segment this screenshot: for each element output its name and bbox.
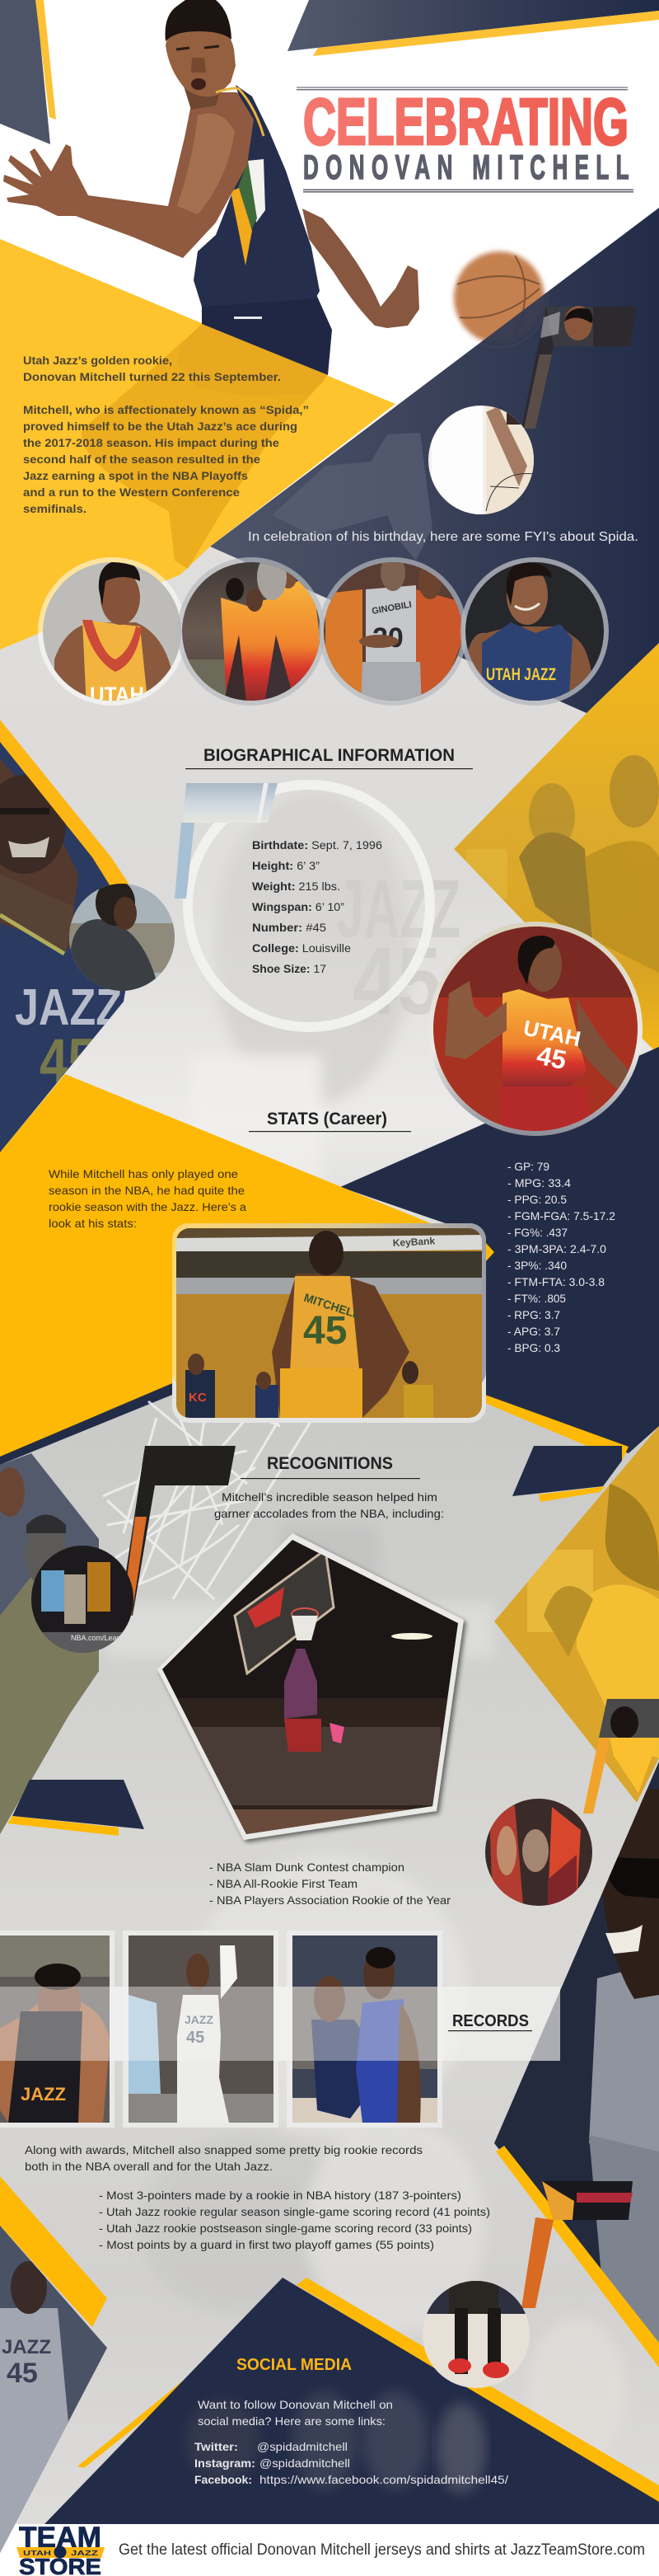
records photo 2 <box>123 1931 278 2128</box>
small circle crowd: NBA.com/League <box>71 1634 129 1642</box>
recognitions intro <box>214 1490 444 1520</box>
face <box>166 23 236 96</box>
left translucent player panel <box>0 1451 107 1838</box>
intro text: the 2017-2018 season. His impact during the <box>23 436 279 449</box>
yellow strip right diagonal <box>496 2146 659 2367</box>
intro text: proved himself to be the Utah Jazz’s ace during <box>23 420 297 433</box>
OKC players <box>185 1354 433 1418</box>
yellow strip above social media triangle <box>297 2278 659 2506</box>
biography facts: Weight: 215 lbs. <box>252 880 340 893</box>
small circle with legs <box>423 2281 530 2388</box>
small navy accent left <box>7 1780 144 1836</box>
player in stats photo: MITCHELL <box>302 1291 362 1321</box>
stats list: - FG%: .437 <box>507 1226 568 1239</box>
yellow strip under navy panel <box>485 1395 629 1461</box>
team store logo <box>16 2522 105 2576</box>
social media text <box>194 2398 508 2486</box>
records list: - Utah Jazz rookie postseason single-game scoring record (33 points) <box>99 2222 472 2235</box>
hair <box>166 0 231 41</box>
facial detail <box>176 46 219 49</box>
intro text <box>23 354 309 515</box>
recognitions intro: Mitchell’s incredible season helped him <box>222 1490 437 1504</box>
circle photo 3: 20 <box>372 622 404 654</box>
stats photo <box>172 1223 486 1423</box>
navy strip under yellow panel <box>0 1382 176 1465</box>
recognitions list: - NBA Slam Dunk Contest champion <box>209 1860 404 1874</box>
left yellow strip bottom <box>0 2176 107 2327</box>
social media text: Facebook: <box>194 2473 252 2486</box>
circle photo 4 <box>460 556 610 709</box>
basketball <box>454 251 544 344</box>
records photo 2: JAZZ <box>185 2013 213 2026</box>
letter J photo top: bowl <box>428 406 534 514</box>
ghost legs in intro panel <box>82 329 432 569</box>
stats list: - APG: 3.7 <box>507 1325 560 1338</box>
small circle: man in hoodie overlooking city <box>69 880 175 993</box>
band tint over record photos <box>0 1987 442 2061</box>
yellow strip left of social triangle <box>77 2381 186 2468</box>
records photo 1 <box>0 1931 115 2128</box>
circle photo 4: UTAH JAZZ <box>486 665 556 684</box>
big biography ring <box>188 785 430 1027</box>
ghost Jazz 45 jersey text <box>336 863 460 1035</box>
small navy accent right <box>512 1446 622 1502</box>
circle photo 2 <box>177 554 325 709</box>
stats photo: KeyBank <box>392 1235 436 1249</box>
records intro text <box>25 2143 423 2173</box>
social media text: social media? Here are some links: <box>198 2414 386 2428</box>
stats list: - BPG: 0.3 <box>507 1341 560 1354</box>
small circle crowd <box>485 1799 592 1906</box>
far arm <box>302 209 419 328</box>
stats list: - 3PM-3PA: 2.4-7.0 <box>507 1242 606 1255</box>
small circle crowd <box>31 1546 133 1653</box>
letter J city photo <box>69 783 278 993</box>
photo circles row <box>33 552 610 709</box>
yellow intro panel <box>0 239 395 650</box>
stats list: - 3P%: .340 <box>507 1259 567 1272</box>
left dark player panel: 45 <box>40 1026 96 1096</box>
heading: stats career: STATS (Career) <box>267 1110 387 1128</box>
ghost Jazz 45 jersey text: 45 <box>353 927 442 1035</box>
left yellow strip <box>0 720 144 940</box>
shorts <box>202 293 332 375</box>
biography facts <box>252 838 382 975</box>
biography facts: Birthdate: Sept. 7, 1996 <box>252 838 382 852</box>
circle photo 3: GINOBILI <box>371 600 413 617</box>
records list: - Most 3-pointers made by a rookie in NBA history (187 3-pointers) <box>99 2189 461 2202</box>
heading: records: RECORDS <box>452 2012 529 2030</box>
stats list: - FT%: .805 <box>507 1292 566 1305</box>
top left corner shape <box>0 0 56 144</box>
right gold panel lower with ghost player <box>494 1426 659 1803</box>
stats list <box>507 1160 615 1354</box>
big jumping player circle: UTAH <box>521 1016 583 1051</box>
intro text: second half of the season resulted in the <box>23 453 260 466</box>
stats intro text: While Mitchell has only played one <box>49 1167 238 1180</box>
letter J photo top: bar and stem <box>521 306 637 429</box>
social media text: Want to follow Donovan Mitchell on <box>198 2398 393 2411</box>
stats intro text: rookie season with the Jazz. Here’s a <box>49 1200 246 1213</box>
social media triangle <box>44 2278 659 2524</box>
yellow arrow tip <box>486 1243 494 1261</box>
biography facts: Height: 6’ 3” <box>252 859 320 872</box>
stats intro text: look at his stats: <box>49 1217 137 1230</box>
records list <box>99 2189 490 2251</box>
letter J fourth: photo at bottom right <box>423 2181 633 2388</box>
social media text: @spidadmitchell <box>257 2440 348 2453</box>
intro text: Utah Jazz’s golden rookie, <box>23 354 172 367</box>
left player panel bottom: JAZZ <box>2 2336 51 2358</box>
intro text: Donovan Mitchell turned 22 this September. <box>23 370 281 383</box>
letter J recognitions photo <box>31 1446 236 1653</box>
ghost background figures <box>107 791 626 2465</box>
recognitions intro: garner accolades from the NBA, including: <box>214 1507 444 1520</box>
left player panel bottom: 45 <box>7 2358 38 2389</box>
title rules <box>297 87 633 193</box>
team store logo: UTAH <box>23 2550 51 2557</box>
social media text: @spidadmitchell <box>259 2456 350 2470</box>
letter J third: lower right photo <box>485 1699 659 1906</box>
jersey collar <box>216 88 264 136</box>
upper and fore arm with hand <box>3 92 254 258</box>
hero player Donovan Mitchell <box>3 0 547 375</box>
circle photo 1 <box>38 557 181 706</box>
navy over ball <box>480 292 547 346</box>
social media text: Twitter: <box>194 2440 238 2453</box>
heading: recognitions: RECOGNITIONS <box>267 1454 393 1473</box>
team store logo: JAZZ <box>71 2550 98 2557</box>
arm highlight <box>177 114 235 214</box>
player in stats photo <box>272 1231 409 1418</box>
biography facts: College: Louisville <box>252 941 351 955</box>
team store logo: TEAM <box>19 2522 101 2554</box>
birthday line: In celebration of his birthday, here are some FYI's about Spida. <box>248 530 638 544</box>
left dark player panel: JAZZ <box>15 979 122 1036</box>
legs tinted yellow <box>177 324 328 396</box>
basketball net <box>103 1401 313 1599</box>
title line 2: DONOVAN MITCHELL <box>303 148 629 187</box>
title <box>303 85 629 187</box>
stats list: - FGM-FGA: 7.5-17.2 <box>507 1209 615 1222</box>
recognitions list <box>209 1860 451 1907</box>
records photo 1: JAZZ <box>21 2084 66 2104</box>
yellow stats panel <box>0 1074 437 1457</box>
dunk photo <box>157 1533 465 1842</box>
biography facts: Number: #45 <box>252 921 326 934</box>
right gold panel with ghost players <box>454 643 659 1055</box>
stats intro text <box>49 1167 246 1230</box>
jersey side stripes <box>231 159 265 265</box>
records intro text: Along with awards, Mitchell also snapped some pretty big rookie records <box>25 2143 423 2156</box>
gray textured background <box>0 547 659 2524</box>
intro text: Mitchell, who is affectionately known as “Spida,” <box>23 403 309 416</box>
left player panel bottom <box>0 2226 111 2555</box>
stats list: - PPG: 20.5 <box>507 1193 567 1206</box>
biography facts: Wingspan: 6’ 10” <box>252 900 344 913</box>
stats list: - MPG: 33.4 <box>507 1176 571 1189</box>
player in stats photo: 45 <box>303 1309 347 1353</box>
social media text: Instagram: <box>194 2456 255 2470</box>
OKC players: KC <box>189 1391 207 1405</box>
dark man panel right <box>486 1756 659 2358</box>
heading: social media: SOCIAL MEDIA <box>236 2356 352 2374</box>
big jumping player circle: 45 <box>535 1040 569 1075</box>
intro text: Jazz earning a spot in the NBA Playoffs <box>23 469 248 482</box>
stats list: - FTM-FTA: 3.0-3.8 <box>507 1275 605 1288</box>
circle photo 1: UTAH <box>90 683 144 707</box>
heading: biographical information: BIOGRAPHICAL INFORMATION <box>203 746 455 765</box>
left dark player panel <box>0 742 125 1152</box>
stats list: - RPG: 3.7 <box>507 1308 560 1321</box>
stats intro text: season in the NBA, he had quite the <box>49 1184 245 1197</box>
records photo 2: 45 <box>186 2029 204 2047</box>
records photo 3 <box>287 1931 442 2128</box>
biography facts: Shoe Size: 17 <box>252 962 326 975</box>
intro text: and a run to the Western Conference <box>23 486 240 499</box>
circle photo 3 <box>319 555 470 709</box>
records intro text: both in the NBA overall and for the Utah Jazz. <box>25 2160 273 2173</box>
navy diagonal panel <box>210 208 659 713</box>
footer white strip <box>0 2526 659 2576</box>
white shorts logo <box>234 317 262 319</box>
ghost Jazz 45 jersey text: JAZZ <box>336 863 460 955</box>
records list: - Utah Jazz rookie regular season single-game scoring record (41 points) <box>99 2205 490 2218</box>
top right banner shape <box>287 0 659 56</box>
neck <box>181 78 224 110</box>
intro text: semifinals. <box>23 502 86 515</box>
navy stats panel <box>340 1047 659 1453</box>
recognitions list: - NBA Players Association Rookie of the Year <box>209 1893 451 1907</box>
stats list: - GP: 79 <box>507 1160 549 1173</box>
jersey <box>194 85 320 307</box>
records white band <box>0 1987 560 2061</box>
big jumping player circle <box>431 923 640 1134</box>
recognitions list: - NBA All-Rookie First Team <box>209 1877 358 1890</box>
social media text: https://www.facebook.com/spidadmitchell45/ <box>259 2473 508 2486</box>
footer call to action: Get the latest official Donovan Mitchell jerseys and shirts at JazzTeamStore.com <box>119 2541 645 2559</box>
records list: - Most points by a guard in first two playoff games (55 points) <box>99 2238 434 2251</box>
